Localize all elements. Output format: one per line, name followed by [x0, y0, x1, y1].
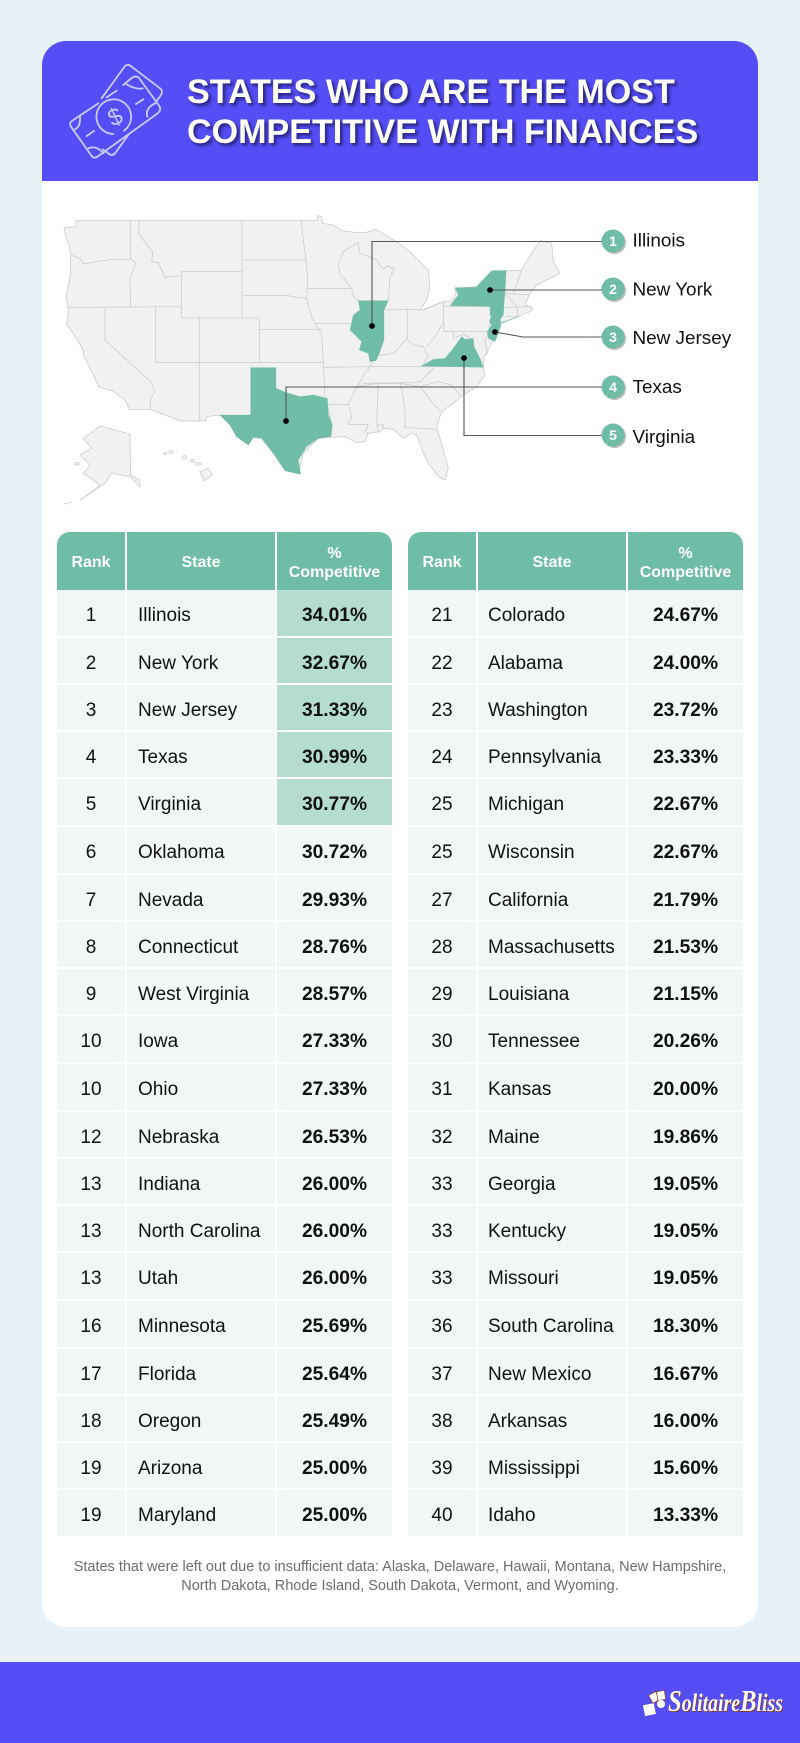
- table: ranks 1 to 19: Texas: [138, 747, 188, 768]
- table: ranks 1 to 19: Florida: [138, 1364, 196, 1385]
- table: ranks 21 to 40: 19.05%: [653, 1221, 718, 1242]
- title: [187, 73, 702, 151]
- table: ranks 1 to 19: New Jersey: [138, 700, 237, 721]
- table: ranks 1 to 19: 27.33%: [302, 1079, 367, 1100]
- table: ranks 21 to 40: 33: [431, 1268, 453, 1289]
- table: ranks 21 to 40: 18.30%: [653, 1316, 718, 1337]
- table: ranks 1 to 19: 4: [86, 747, 96, 768]
- table: ranks 21 to 40: 24: [431, 747, 453, 768]
- table: ranks 21 to 40: 29: [431, 984, 453, 1005]
- table: ranks 21 to 40: 22.67%: [653, 842, 718, 863]
- legend item 5: Virginia: [602, 424, 696, 448]
- table: ranks 1 to 19: Minnesota: [138, 1316, 226, 1337]
- table: ranks 1 to 19: 5: [86, 794, 96, 815]
- table: ranks 21 to 40: 24.67%: [653, 605, 718, 626]
- legend item 3: New Jersey: [602, 326, 732, 350]
- title: COMPETITIVE WITH FINANCES: [187, 113, 698, 151]
- table: ranks 21 to 40: Alabama: [488, 653, 563, 674]
- table: ranks 21 to 40: 16.67%: [653, 1364, 718, 1385]
- table: ranks 21 to 40: Maine: [488, 1127, 540, 1148]
- table: ranks 1 to 19: 2: [86, 653, 96, 674]
- table: ranks 1 to 19: 28.76%: [302, 937, 367, 958]
- table: ranks 21 to 40: 36: [431, 1316, 453, 1337]
- table: ranks 21 to 40: Idaho: [488, 1505, 536, 1526]
- table: ranks 1 to 19: West Virginia: [138, 984, 249, 1005]
- table: ranks 21 to 40: 21.53%: [653, 937, 718, 958]
- table: ranks 21 to 40: Wisconsin: [488, 842, 575, 863]
- table: ranks 21 to 40: 37: [431, 1364, 453, 1385]
- legend item 1: Illinois: 1: [609, 233, 617, 249]
- table: ranks 1 to 19: 29.93%: [302, 890, 367, 911]
- footnote: [74, 1559, 726, 1594]
- table header: [408, 532, 743, 590]
- highlighted state: Illinois: [350, 301, 388, 362]
- table: ranks 1 to 19: 1: [86, 605, 96, 626]
- table: ranks 21 to 40: 40: [431, 1505, 453, 1526]
- table: ranks 21 to 40: 39: [431, 1458, 453, 1479]
- table: ranks 1 to 19: Oklahoma: [138, 842, 225, 863]
- table: ranks 21 to 40: 27: [431, 890, 453, 911]
- table: ranks 21 to 40: 20.00%: [653, 1079, 718, 1100]
- legend item 1: Illinois: [602, 230, 685, 254]
- table: ranks 1 to 19: 28.57%: [302, 984, 367, 1005]
- table: ranks 1 to 19: 17: [80, 1364, 102, 1385]
- legend item 2: New York: New York: [632, 280, 713, 300]
- footnote: North Dakota, Rhode Island, South Dakota, Vermont, and Wyoming.: [181, 1578, 619, 1594]
- table: ranks 21 to 40: Missouri: [488, 1268, 559, 1289]
- table: ranks 21 to 40: 21.79%: [653, 890, 718, 911]
- table: ranks 1 to 19: [57, 532, 392, 1536]
- table: ranks 1 to 19: 25.69%: [302, 1316, 367, 1337]
- table: ranks 1 to 19: 30.77%: [302, 794, 367, 815]
- table: ranks 1 to 19: Arizona: [138, 1458, 202, 1479]
- table: ranks 1 to 19: 13: [80, 1221, 102, 1242]
- legend item 3: New Jersey: New Jersey: [632, 328, 732, 349]
- table: ranks 1 to 19: 27.33%: [302, 1031, 367, 1052]
- table: ranks 21 to 40: Georgia: [488, 1174, 556, 1195]
- table: ranks 1 to 19: 3: [86, 700, 96, 721]
- table: ranks 1 to 19: 13: [80, 1174, 102, 1195]
- legend item 2: New York: [602, 278, 713, 302]
- leader dots: [283, 287, 498, 424]
- table: ranks 21 to 40: 21: [431, 605, 453, 626]
- table: ranks 1 to 19: 26.00%: [302, 1174, 367, 1195]
- footer bar: [0, 1662, 800, 1743]
- table: ranks 21 to 40: 22: [431, 653, 453, 674]
- table header: Competitive: [289, 564, 380, 580]
- table: ranks 1 to 19: 31.33%: [302, 700, 367, 721]
- logo: Solitaire Bliss: SolitaireBliss: [668, 1684, 783, 1718]
- table: ranks 1 to 19: Illinois: [138, 605, 191, 626]
- legend item 4: Texas: [602, 376, 682, 400]
- table: ranks 21 to 40: 33: [431, 1174, 453, 1195]
- table: ranks 21 to 40: Pennsylvania: [488, 747, 601, 768]
- footnote: States that were left out due to insufficient data: Alaska, Delaware, Hawaii, Montana, New Hampshire,: [74, 1559, 726, 1575]
- table: ranks 1 to 19: 30.99%: [302, 747, 367, 768]
- table: ranks 21 to 40: 25: [431, 794, 453, 815]
- table: ranks 21 to 40: Michigan: [488, 794, 564, 815]
- table: ranks 21 to 40: 16.00%: [653, 1411, 718, 1432]
- table: ranks 1 to 19: 26.53%: [302, 1127, 367, 1148]
- table: ranks 1 to 19: Nevada: [138, 890, 204, 911]
- table: ranks 21 to 40: Louisiana: [488, 984, 569, 1005]
- table: ranks 1 to 19: Connecticut: [138, 937, 238, 958]
- table: ranks 21 to 40: California: [488, 890, 568, 911]
- table header: State: [181, 554, 221, 571]
- table: ranks 1 to 19: 18: [80, 1411, 102, 1432]
- table: ranks 21 to 40: 22.67%: [653, 794, 718, 815]
- table: ranks 21 to 40: 31: [431, 1079, 453, 1100]
- legend item 1: Illinois: Illinois: [632, 230, 685, 252]
- table: ranks 21 to 40: Kentucky: [488, 1221, 566, 1242]
- table: ranks 1 to 19: Iowa: [138, 1031, 178, 1052]
- US map with leader lines and legend: [64, 215, 732, 504]
- legend item 4: Texas: 4: [609, 379, 617, 395]
- table: ranks 21 to 40: 19.05%: [653, 1268, 718, 1289]
- table: ranks 1 to 19: 6: [86, 842, 96, 863]
- table: ranks 21 to 40: Washington: [488, 700, 588, 721]
- table: ranks 21 to 40: 23.33%: [653, 747, 718, 768]
- header banner: [42, 41, 758, 181]
- table: ranks 21 to 40: 23.72%: [653, 700, 718, 721]
- table: ranks 1 to 19: 32.67%: [302, 653, 367, 674]
- table: ranks 21 to 40: 19.05%: [653, 1174, 718, 1195]
- table: ranks 1 to 19: Virginia: [138, 794, 201, 815]
- table: ranks 21 to 40: 25: [431, 842, 453, 863]
- table: ranks 1 to 19: 25.00%: [302, 1505, 367, 1526]
- table: ranks 21 to 40: 21.15%: [653, 984, 718, 1005]
- table: ranks 21 to 40: Mississippi: [488, 1458, 580, 1479]
- Hawaii: [164, 450, 213, 481]
- highlighted state: New Jersey: [487, 315, 501, 342]
- table: ranks 21 to 40: 32: [431, 1127, 453, 1148]
- table: ranks 1 to 19: 34.01%: [302, 605, 367, 626]
- table: ranks 1 to 19: Utah: [138, 1268, 178, 1289]
- table: ranks 1 to 19: 26.00%: [302, 1221, 367, 1242]
- icon: dollar bills: $: [104, 102, 127, 132]
- leader lines: [286, 242, 613, 436]
- Alaska: [64, 426, 140, 504]
- table: ranks 1 to 19: 10: [80, 1031, 102, 1052]
- table: ranks 1 to 19: 10: [80, 1079, 102, 1100]
- table: ranks 21 to 40: 24.00%: [653, 653, 718, 674]
- table: ranks 21 to 40: South Carolina: [488, 1316, 614, 1337]
- highlighted state: Texas: [220, 368, 332, 474]
- table: ranks 21 to 40: 33: [431, 1221, 453, 1242]
- table header: [57, 532, 392, 590]
- table: ranks 1 to 19: Oregon: [138, 1411, 201, 1432]
- table: ranks 1 to 19: 25.49%: [302, 1411, 367, 1432]
- table: ranks 21 to 40: 30: [431, 1031, 453, 1052]
- table: ranks 1 to 19: 16: [80, 1316, 102, 1337]
- highlighted state: New York: [450, 271, 518, 323]
- table: ranks 1 to 19: 13: [80, 1268, 102, 1289]
- table: ranks 1 to 19: 9: [86, 984, 96, 1005]
- table: ranks 1 to 19: Indiana: [138, 1174, 200, 1195]
- title: STATES WHO ARE THE MOST: [187, 73, 675, 111]
- table: ranks 21 to 40: 19.86%: [653, 1127, 718, 1148]
- table: ranks 1 to 19: New York: [138, 653, 218, 674]
- table: ranks 1 to 19: 30.72%: [302, 842, 367, 863]
- table: ranks 1 to 19: North Carolina: [138, 1221, 260, 1242]
- table: ranks 1 to 19: Maryland: [138, 1505, 216, 1526]
- table: ranks 21 to 40: Massachusetts: [488, 937, 615, 958]
- table: ranks 21 to 40: New Mexico: [488, 1364, 591, 1385]
- table: ranks 21 to 40: 23: [431, 700, 453, 721]
- table: ranks 21 to 40: Kansas: [488, 1079, 551, 1100]
- table header: %: [678, 544, 693, 562]
- legend item 5: Virginia: 5: [609, 427, 617, 443]
- table: ranks 1 to 19: 8: [86, 937, 96, 958]
- table: ranks 21 to 40: Colorado: [488, 605, 565, 626]
- table: ranks 21 to 40: 13.33%: [653, 1505, 718, 1526]
- table: ranks 1 to 19: Ohio: [138, 1079, 178, 1100]
- table: ranks 1 to 19: 19: [80, 1505, 102, 1526]
- table header: Rank: [71, 554, 111, 571]
- table: ranks 1 to 19: 12: [80, 1127, 102, 1148]
- table: ranks 21 to 40: 38: [431, 1411, 453, 1432]
- table header: %: [327, 544, 342, 562]
- table header: Competitive: [640, 564, 731, 580]
- legend item 4: Texas: Texas: [632, 377, 682, 398]
- table header: State: [532, 554, 572, 571]
- legend item 3: New Jersey: 3: [609, 329, 617, 345]
- table: ranks 1 to 19: 25.00%: [302, 1458, 367, 1479]
- map of the United States: [64, 216, 560, 504]
- legend item 5: Virginia: Virginia: [632, 427, 696, 448]
- table: ranks 21 to 40: [408, 532, 743, 1536]
- table: ranks 1 to 19: Nebraska: [138, 1127, 219, 1148]
- table: ranks 1 to 19: 25.64%: [302, 1364, 367, 1385]
- table: ranks 21 to 40: 20.26%: [653, 1031, 718, 1052]
- highlighted state: Virginia: [422, 337, 483, 367]
- table: ranks 21 to 40: Tennessee: [488, 1031, 580, 1052]
- table: ranks 21 to 40: Arkansas: [488, 1411, 567, 1432]
- table: ranks 1 to 19: 26.00%: [302, 1268, 367, 1289]
- table: ranks 1 to 19: 19: [80, 1458, 102, 1479]
- table: ranks 21 to 40: 28: [431, 937, 453, 958]
- table: ranks 21 to 40: 15.60%: [653, 1458, 718, 1479]
- legend item 2: New York: 2: [609, 281, 617, 297]
- table: ranks 1 to 19: 7: [86, 890, 96, 911]
- icon: dollar bills: [69, 64, 163, 159]
- table header: Rank: [422, 554, 462, 571]
